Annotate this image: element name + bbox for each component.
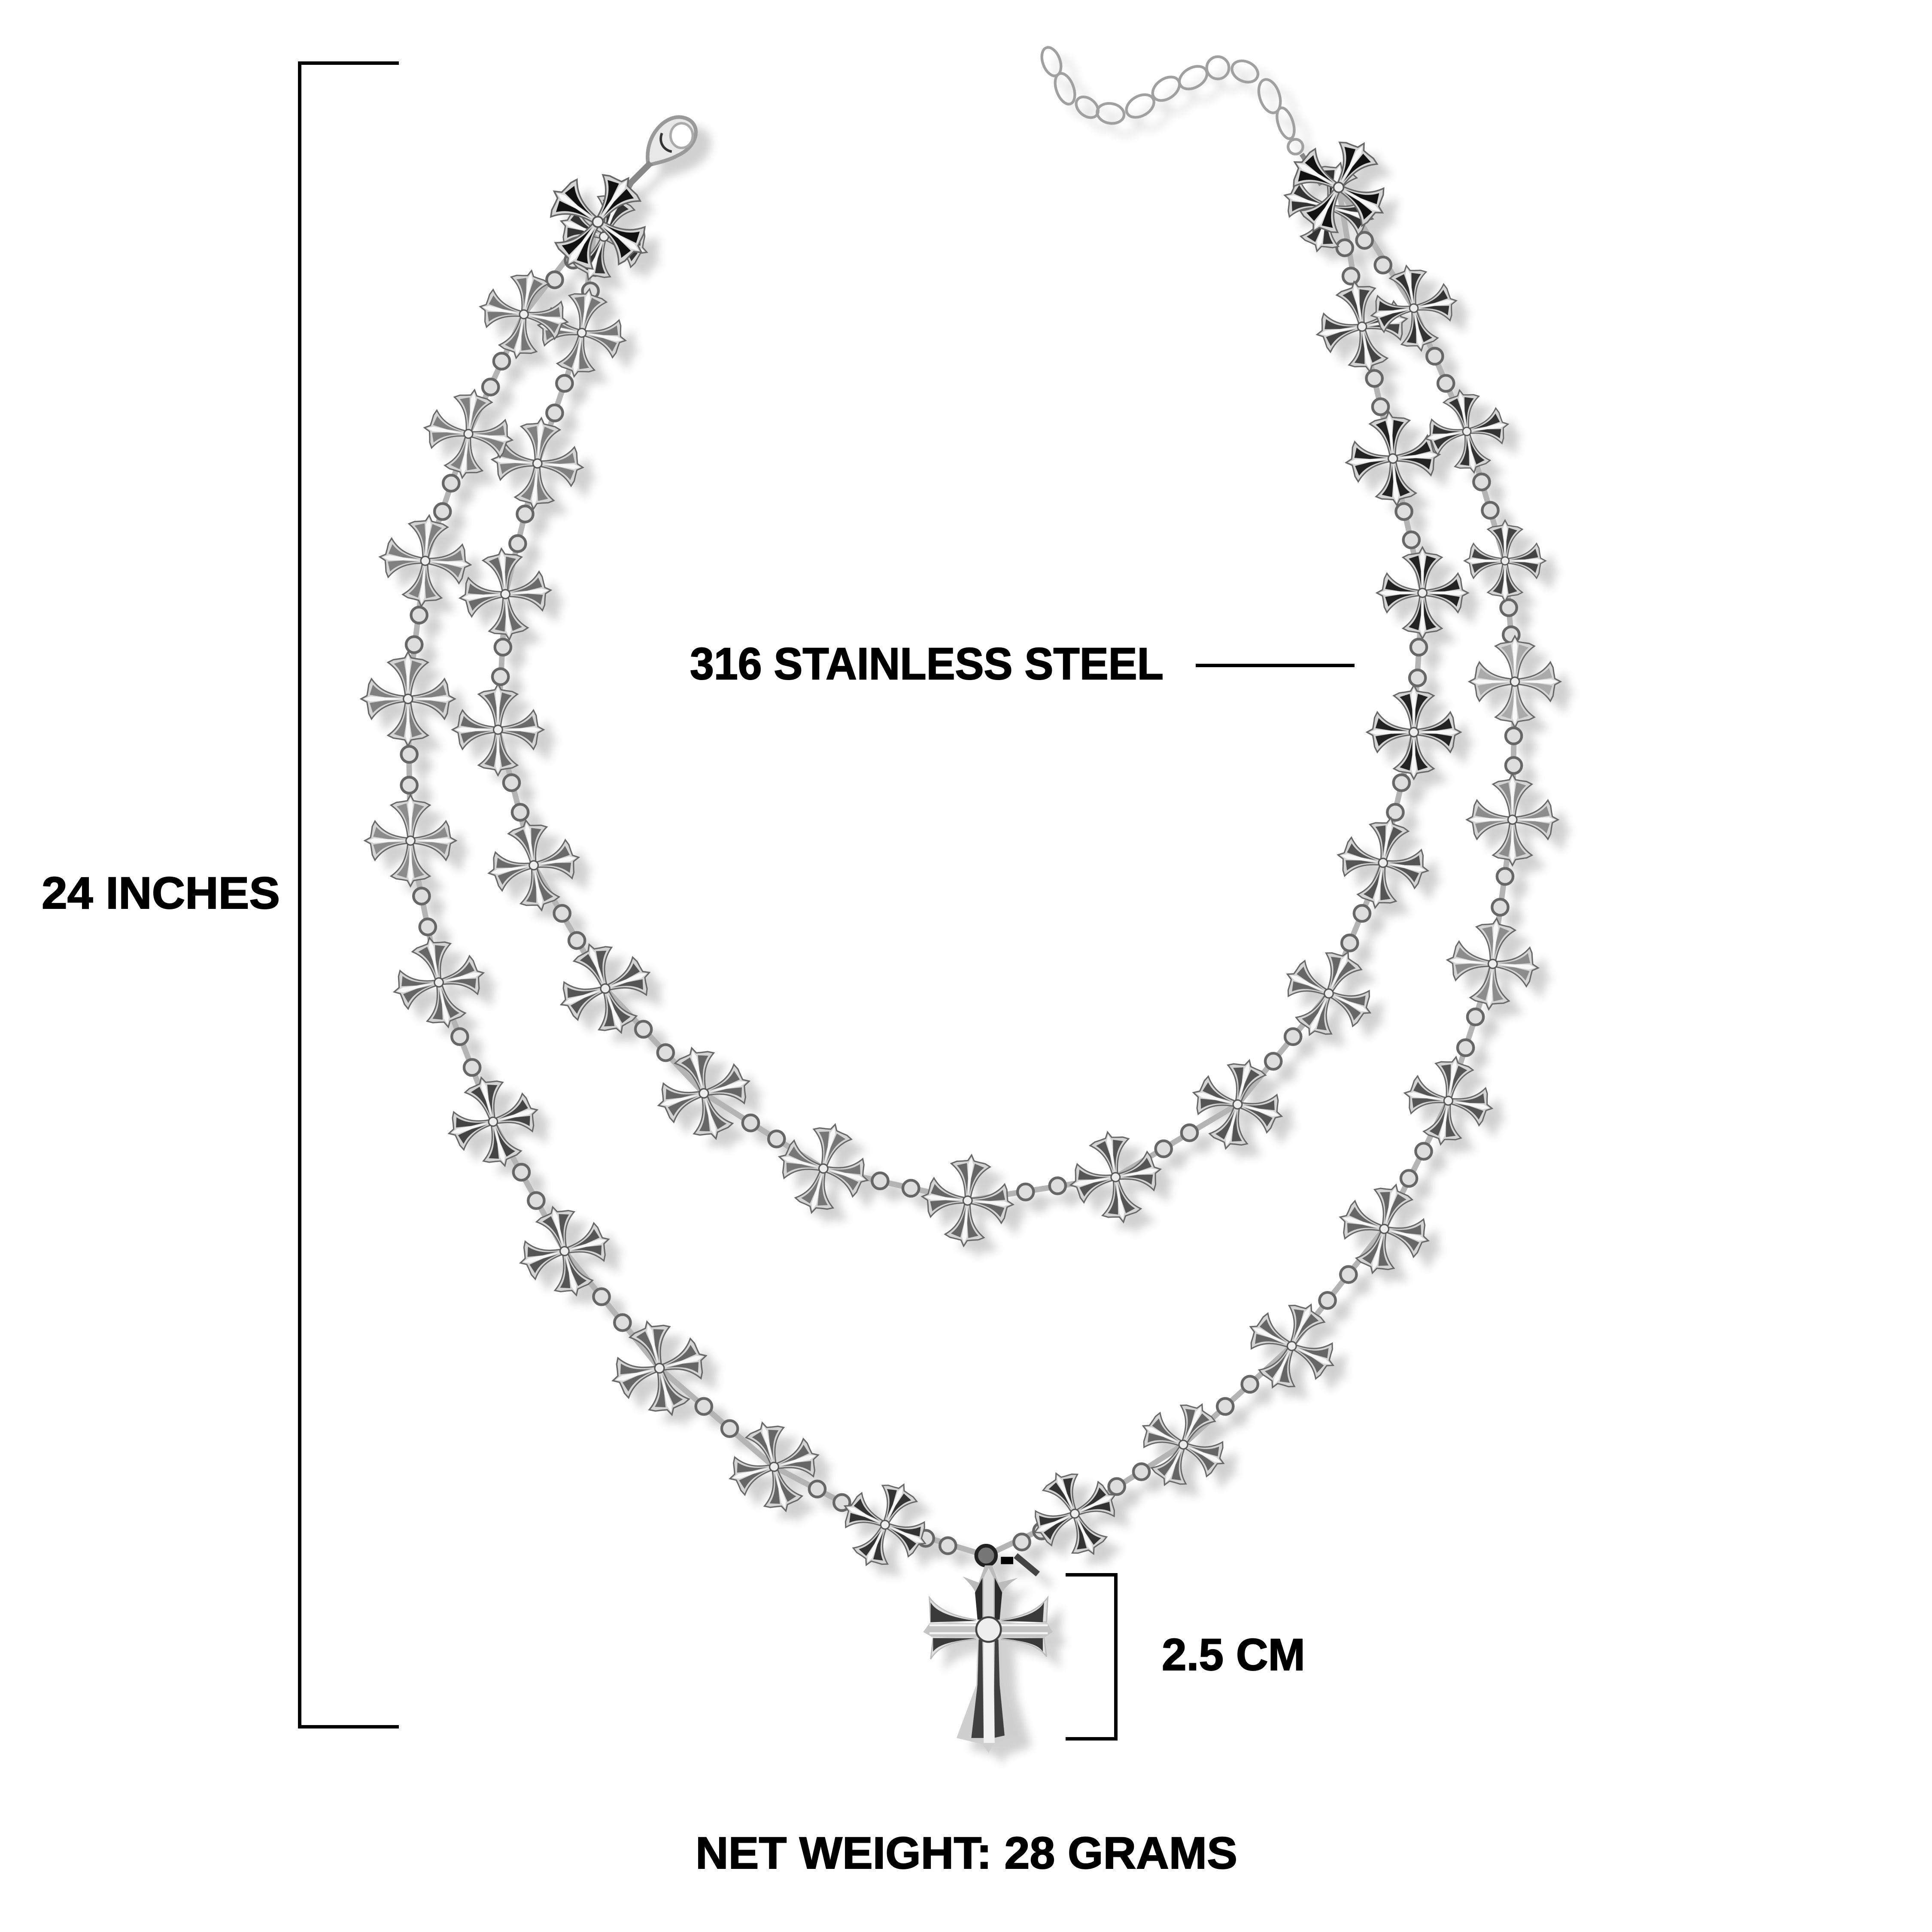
lobster clasp xyxy=(619,117,696,204)
crosses: lower strand xyxy=(361,258,1561,1584)
label: material: 316 STAINLESS STEEL xyxy=(690,639,1163,689)
label: net weight: NET WEIGHT: 28 GRAMS xyxy=(696,1828,1237,1878)
top left junction crosses xyxy=(523,148,672,296)
links: upper strand xyxy=(492,187,1427,1200)
label: pendant size: 2.5 CM xyxy=(1162,1630,1305,1680)
bracket: pendant size xyxy=(1066,1575,1116,1739)
label: 24 inches: 24 INCHES xyxy=(42,868,280,918)
pendant bail xyxy=(976,1546,1038,1574)
bracket: 24 inches xyxy=(300,63,399,1727)
extender chain xyxy=(1038,45,1321,185)
crosses: upper strand xyxy=(452,273,1468,1250)
links: lower strand xyxy=(401,187,1522,1555)
top right junction crosses xyxy=(1269,118,1408,263)
necklace xyxy=(361,45,1561,1753)
pendant cross xyxy=(923,1546,1053,1753)
leader line: material xyxy=(1196,664,1355,667)
strand: upper choker xyxy=(452,187,1468,1250)
strand: lower necklace xyxy=(361,187,1561,1584)
